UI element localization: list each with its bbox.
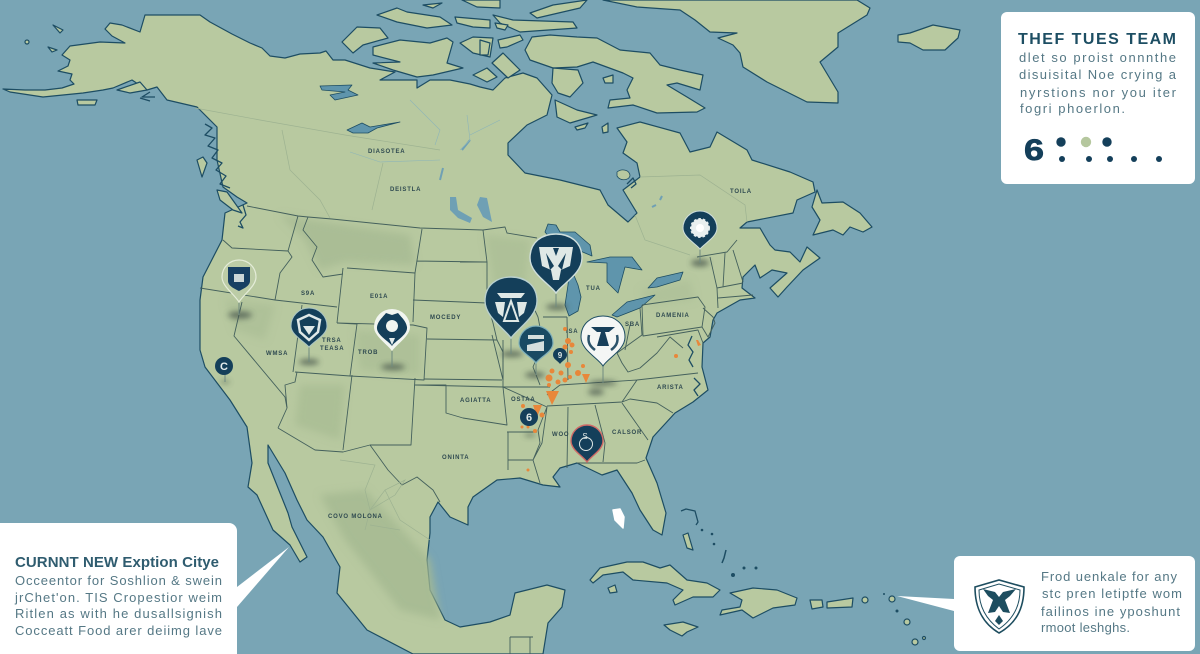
text block: right callout body: stc pren letiptfe wom [1042, 586, 1182, 601]
small map labels: ONINTA [442, 455, 469, 461]
small map labels: ISA [566, 329, 578, 335]
small map labels: DAMENIA [656, 313, 690, 319]
panel: team card [1001, 12, 1195, 184]
terrain shading [225, 215, 695, 620]
pin: Oregon shield [222, 260, 256, 302]
pin: small teal emblem [519, 326, 553, 363]
stat: number 6 with dots [1024, 134, 1162, 167]
islands: arctic archipelago [342, 0, 705, 133]
pin: tiny number [553, 348, 567, 364]
island: Greenland [603, 0, 870, 103]
stat: number 6 with dots: 6 [1024, 134, 1044, 167]
text block: team card body: fogri phoerlon. [1020, 101, 1125, 116]
small map labels: WMSA [266, 351, 288, 357]
island: Iceland [898, 25, 960, 50]
pin: number 6 [520, 408, 538, 426]
small map labels: TEASA [320, 346, 344, 352]
pin: California C: C [220, 361, 228, 373]
small map labels: ARISTA [657, 385, 684, 391]
text block: left callout body: Occeentor for Soshlion & swein [15, 573, 222, 588]
small map labels: CALSOR [612, 430, 642, 436]
lakes [320, 85, 683, 317]
icon: shield emblem [975, 580, 1024, 633]
small map labels: WOO [552, 432, 569, 438]
island: white blob in the Gulf [613, 509, 624, 528]
small map labels: E01A [370, 294, 388, 300]
heading: team card: THEF TUES TEAM [1018, 31, 1176, 48]
pin: Iowa shield [485, 277, 537, 338]
text block: team card body: dlet so proist onnnthe [1019, 50, 1176, 65]
small map labels: TUA [586, 286, 601, 292]
pin: Utah emblem [291, 308, 327, 347]
small map labels: DEISTLA [390, 187, 421, 193]
text block: team card body: nyrstions nor you iter [1020, 85, 1177, 100]
text block: team card body [1019, 50, 1177, 116]
Mexico internal lines [340, 460, 430, 540]
pin: tiny number: 9 [558, 351, 563, 360]
rivers and provincial lines [195, 100, 747, 255]
small map labels: AGIATTA [460, 398, 491, 404]
text block: right callout body: rmoot leshghs. [1041, 620, 1130, 635]
orange incident markers [520, 327, 701, 472]
map: North America [3, 0, 960, 654]
pin: Gulf red outline [571, 425, 603, 462]
heading: left callout: CURNNT NEW Exption Citye [15, 554, 219, 571]
small map labels: S9A [301, 291, 315, 297]
text block: left callout body: jrChet'on. TIS Cropestior weim [14, 590, 222, 605]
text block: right callout body [1041, 569, 1182, 635]
text block: team card body: disuisital Noe crying a [1019, 67, 1177, 82]
small map labels: TROB [358, 350, 378, 356]
small map labels: OSTAA [511, 397, 536, 403]
pin shadows [220, 260, 709, 436]
small map labels: COVO MOLONA [328, 514, 383, 520]
callout: left explanation panel [0, 523, 289, 654]
pin stems [225, 249, 700, 383]
pin: white insignia [581, 316, 625, 366]
small map labels: MOCEDY [430, 315, 461, 321]
small map labels: SBA [625, 322, 640, 328]
small map labels: DIASOTEA [368, 149, 405, 155]
pin: California C [215, 357, 233, 375]
pin: Quebec gear [683, 211, 717, 249]
text block: left callout body [14, 573, 222, 638]
small map labels: TOILA [730, 189, 752, 195]
pin: Colorado gear [374, 309, 410, 351]
islands: Pacific and Alaska [25, 25, 242, 213]
borders: US states, Canada and Mexico [200, 206, 753, 654]
pin: Gulf red outline: S [582, 432, 588, 441]
text block: right callout body: failinos ine yposhunt [1041, 604, 1180, 619]
small map labels: TRSA [322, 338, 342, 344]
landmass: mainland North America [3, 15, 820, 654]
pin: number 6: 6 [526, 412, 532, 424]
island: Newfoundland [812, 190, 872, 235]
text block: left callout body: Cocceatt Food arer deiimg lave [15, 623, 222, 638]
coastal fjords and sounds [140, 92, 700, 396]
pin: Great Lakes shield [530, 234, 582, 293]
islands: Caribbean [590, 509, 926, 645]
small map labels [266, 149, 752, 520]
text block: right callout body: Frod uenkale for any [1041, 569, 1178, 584]
text block: left callout body: Ritlen as with he dusallsignish [15, 606, 222, 621]
callout: right shield panel [897, 556, 1195, 651]
